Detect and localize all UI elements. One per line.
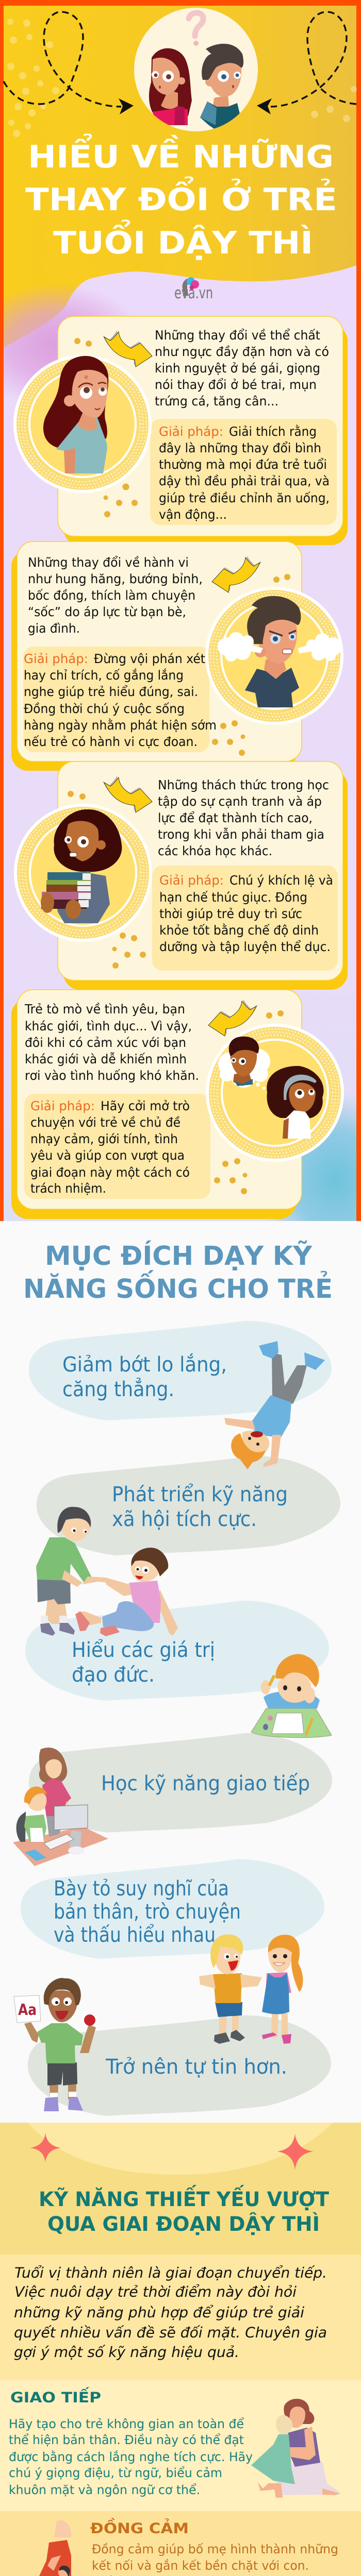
intro text: Tuổi vị thành niên là giai đoạn chuyển tiếp. [14, 2264, 327, 2281]
intro text: gợi ý một số kỹ năng hiệu quả. [14, 2344, 239, 2361]
solution box: hay chỉ trích, cố gắng lắng [24, 668, 184, 683]
problem text: Những thay đổi về thể chất [155, 328, 320, 343]
solution box: Chú ý khích lệ và [229, 873, 333, 888]
medallion: girl with books [14, 804, 152, 942]
body text: Đồng cảm giúp bố mẹ hình thành những [92, 2542, 338, 2556]
panel: essential skills [0, 2123, 361, 2255]
body text: được bằng cách lắng nghe tích cực. Hãy [9, 2450, 253, 2464]
blob: confidence [28, 2015, 331, 2116]
solution box: Đừng vội phán xét [94, 651, 205, 666]
card background [58, 316, 348, 545]
logo: eva.vn [174, 277, 213, 302]
heading: NĂNG SỐNG CHO TRẺ [23, 1270, 333, 1304]
solution box: khỏe tốt bằng chế độ dinh [159, 923, 319, 938]
problem text: lực để đạt thành tích cao, [158, 810, 313, 825]
heading: MỤC ĐÍCH DẠY KỸ [45, 1240, 313, 1272]
solution box: Giải pháp: [30, 1098, 95, 1113]
problem text: Những thách thức trong học [158, 777, 329, 792]
problem text: các khóa học khác. [158, 843, 272, 858]
solution box: chuyện với trẻ về chủ đề [30, 1115, 180, 1130]
icon: star [277, 2133, 314, 2170]
arrow [212, 556, 261, 592]
blob: social skills: xã hội tích cực. [112, 1507, 257, 1531]
heading: GIAO TIẾP [10, 2387, 101, 2406]
problem text: rơi vào tình huống khó khăn. [25, 1068, 199, 1083]
solution box: nhạy cảm, giới tính, tình [30, 1131, 178, 1146]
heading [39, 2184, 329, 2236]
solution box: yêu và giúp con vượt qua [30, 1148, 185, 1163]
blob: communication [29, 1733, 332, 1833]
problem text [24, 1002, 199, 1083]
blob: confidence: Trở nên tự tin hơn. [105, 2055, 287, 2079]
blob: self expression: bản thân, trò chuyện [54, 1900, 241, 1924]
problem text: tập do sự cạnh tranh và áp [158, 794, 322, 809]
card background [11, 990, 302, 1219]
solution box: Giải pháp: [24, 651, 88, 666]
solution box: giúp trẻ điều chỉnh ăn uống, [159, 490, 330, 505]
card background [58, 761, 348, 990]
panel: empathy [0, 2511, 361, 2576]
solution box: nghe giúp trẻ hiểu đúng, sai. [24, 684, 198, 699]
solution box: Giải pháp: [159, 873, 224, 888]
body text: Hãy tạo cho trẻ không gian an toàn để [9, 2417, 244, 2431]
problem text [28, 555, 203, 636]
illustration: handstand boy [224, 1341, 325, 1469]
solution box [150, 419, 337, 525]
blob: social skills: Phát triển kỹ năng [112, 1483, 288, 1506]
illustration: boy helps girl [36, 1507, 178, 1636]
solution box [152, 866, 338, 971]
problem text: Những thay đổi về hành vi [28, 555, 189, 570]
main title: HIỂU VỀ NHỮNG [28, 133, 334, 175]
intro text: Việc nuôi dạy trẻ thời điểm này đòi hỏi [14, 2283, 297, 2300]
title illustration: curious teens [25, 8, 337, 261]
solution box: Giải thích rằng [229, 424, 317, 439]
problem text: khác giới, tình dục... Vì vậy, [25, 1019, 192, 1033]
panel: curiosity about love [11, 990, 344, 1219]
panel: communication [0, 2380, 361, 2511]
blob: self expression [21, 1859, 324, 1959]
decorative dots [68, 791, 146, 969]
arrow [208, 999, 258, 1036]
main title [25, 133, 337, 261]
illustration: mother and child [39, 2520, 84, 2576]
problem text [158, 777, 329, 858]
solution box: giai đoạn này một cách có [30, 1165, 190, 1180]
blob: moral values: đạo đức. [72, 1663, 155, 1687]
icon: star [30, 2132, 61, 2163]
blob: self expression: Bày tỏ suy nghĩ của [54, 1877, 229, 1901]
solution box: thường mà mọi đứa trẻ tuổi [159, 457, 327, 472]
illustration: confident boy: Aa [18, 2001, 37, 2019]
problem text: trong khi vẫn phải tham gia [158, 827, 324, 842]
blob: moral values [25, 1601, 329, 1701]
solution box: hàng ngày nhằm phát hiện sớm [24, 718, 217, 733]
illustration: mother and son at computer [13, 1748, 108, 1866]
illustration: boy writing [251, 1654, 332, 1738]
solution box: Đồng thời chú ý cuộc sống [24, 701, 185, 716]
dashed arrow right [257, 12, 356, 114]
solution box: Hãy cởi mở trò [101, 1098, 190, 1113]
heading: KỸ NĂNG THIẾT YẾU VƯỢT [39, 2184, 329, 2211]
problem text: gia đình. [28, 621, 80, 636]
body text [9, 2417, 253, 2497]
icon: question mark [189, 13, 203, 46]
problem text: kinh nguyệt ở bé gái, giọng [155, 361, 320, 376]
solution box: trách nhiệm. [30, 1181, 106, 1196]
heading: ĐỒNG CẢM [90, 2518, 189, 2537]
card background [11, 541, 302, 771]
body text: kết nối và gắn kết bền chặt với con. [92, 2558, 309, 2573]
panel: purple background [0, 265, 361, 1267]
solution box: đây là những thay đổi bình [159, 440, 321, 455]
problem text: “sốc” do áp lực từ bạn bè, [28, 604, 186, 619]
panel: introduction [0, 2255, 361, 2380]
solution box [24, 1094, 210, 1199]
blob: reduce anxiety [29, 1321, 332, 1420]
steam clouds [218, 632, 342, 662]
solution box: thời giúp trẻ duy trì sức [159, 906, 302, 921]
problem text: trứng cá, tăng cân... [155, 394, 278, 409]
problem text: đôi khi có cảm xúc với bạn [25, 1035, 186, 1050]
intro text: những kỹ năng phù hợp để giúp trẻ giải [14, 2304, 304, 2321]
intro text: quyết nhiều vấn đề sẽ đối mặt. Chuyên gia [14, 2324, 327, 2341]
illustration: two kids chatting [199, 1935, 303, 2044]
problem text: nói thay đổi ở bé trai, mụn [155, 377, 317, 392]
problem text: khác giới và dễ khiến mình [25, 1052, 187, 1066]
decorative dots [7, 19, 357, 137]
body text: khuôn mặt và ngôn ngữ cơ thể. [9, 2483, 200, 2497]
heading [23, 1240, 333, 1304]
arrow [103, 776, 152, 812]
blob: self expression: và thấu hiểu nhau. [54, 1923, 221, 1947]
blob: moral values: Hiểu các giá trị [72, 1638, 215, 1662]
problem text [155, 328, 329, 409]
problem text: như ngực đầy đặn hơn và có [155, 344, 329, 359]
illustration: girl [149, 48, 192, 125]
dashed arrow left [4, 12, 134, 114]
panel: behaviour changes [11, 541, 343, 771]
panel: physical changes [13, 316, 348, 545]
solution box [23, 647, 217, 752]
illustration: boy [200, 44, 243, 134]
decorative dots [214, 1010, 284, 1194]
medallion: angry boy [205, 587, 343, 725]
solution box: dậy thì đều phải trải qua, và [159, 473, 330, 488]
solution box: vận động... [159, 507, 227, 522]
problem text: như hung hăng, bướng bỉnh, [28, 571, 203, 586]
logo: eva.vn: eva.vn [174, 284, 213, 302]
arrow [103, 330, 152, 367]
illustration: mother hugging daughter [251, 2399, 340, 2498]
blob: reduce anxiety: căng thẳng. [62, 1377, 174, 1401]
body text: thể hiện bản thân. Điều này có thể đạt [9, 2433, 244, 2447]
decorative dots [74, 338, 138, 517]
panel: purposes of life skills [13, 1240, 340, 2116]
main title: THAY ĐỔI Ở TRẺ [25, 176, 337, 218]
intro text [14, 2264, 327, 2361]
solution box: dưỡng và tập luyện thể dục. [159, 939, 331, 954]
thought cloud [218, 1049, 270, 1090]
solution box: Giải pháp: [159, 424, 223, 439]
blob: reduce anxiety: Giảm bớt lo lắng, [62, 1353, 227, 1377]
solution box: hạn chế thúc giục. Đồng [159, 890, 307, 905]
decorative dots [212, 574, 290, 756]
illustration: confident boy [14, 1978, 96, 2111]
blob: social skills [37, 1456, 340, 1555]
panel: header [0, 0, 361, 1221]
body text: chú ý giọng điệu, từ ngữ, biểu cảm [9, 2466, 222, 2480]
body text [92, 2542, 340, 2576]
heading: QUA GIAI ĐOẠN DẬY THÌ [47, 2212, 320, 2236]
panel: study pressure [14, 761, 348, 990]
main title: TUỔI DẬY THÌ [53, 219, 313, 261]
problem text: bốc đồng, thích làm chuyện [28, 588, 195, 603]
solution box: nếu trẻ có hành vi cực đoan. [24, 734, 198, 749]
problem text: Trẻ tò mò về tình yêu, bạn [24, 1002, 185, 1016]
medallion: girl with pimple [13, 355, 152, 493]
medallion: girl thinking about boy [206, 1024, 344, 1162]
blob: communication: Học kỹ năng giao tiếp [101, 1772, 310, 1795]
